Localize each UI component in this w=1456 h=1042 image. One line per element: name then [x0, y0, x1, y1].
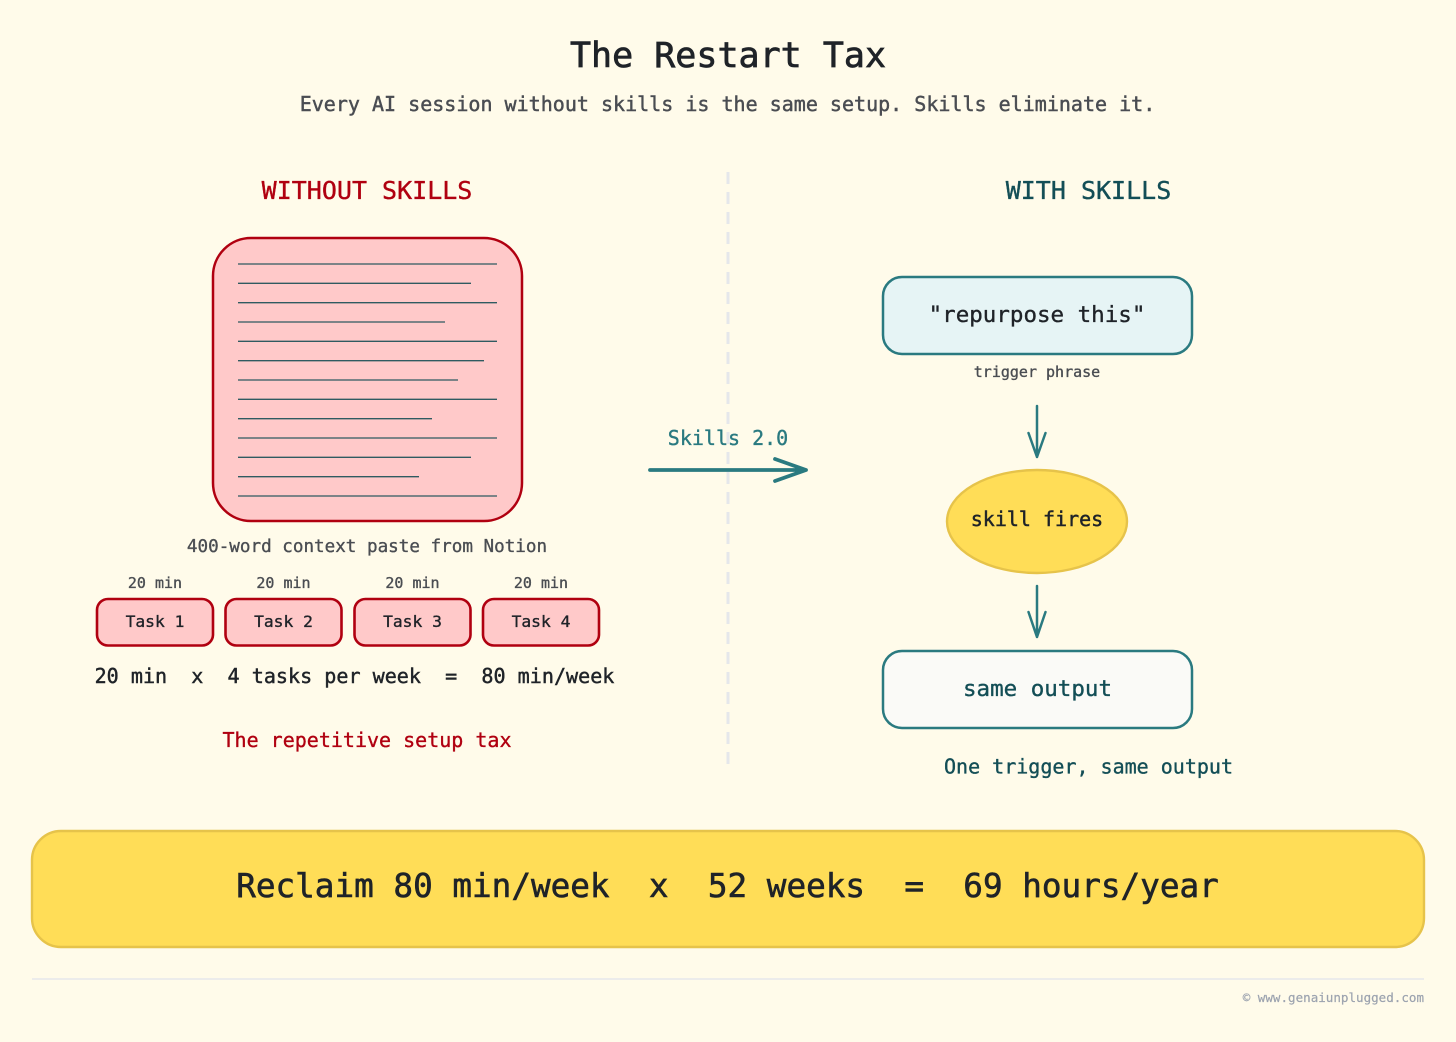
arrow: skills 2.0: Skills 2.0: [668, 426, 788, 450]
skill fires ellipse: [947, 470, 1127, 573]
task 3: Task 3: [383, 612, 442, 631]
skill fires ellipse: skill fires: [971, 507, 1103, 531]
formula: 20 min x 4 tasks per week = 80 min/week: [95, 664, 614, 688]
trigger box: [883, 277, 1192, 354]
arrow down 2: [1028, 586, 1046, 637]
arrow down 1: [1028, 406, 1046, 457]
task 3: 20 min: [385, 574, 440, 592]
footer copyright: © www.genaiunplugged.com: [1243, 990, 1424, 1005]
task 4: 20 min: [514, 574, 568, 592]
task 1: 20 min: [128, 574, 182, 592]
subtitle: Every AI session without skills is the same setup. Skills eliminate it.: [300, 92, 1155, 116]
task 2: [226, 574, 342, 646]
task 4: [483, 574, 599, 646]
task 3: [354, 574, 470, 646]
arrow: skills 2.0: [650, 426, 806, 481]
trigger caption: trigger phrase: [974, 363, 1100, 381]
task 1: [97, 574, 213, 646]
task 2: Task 2: [254, 612, 313, 631]
context paste document: [213, 238, 522, 521]
heading: without skills: WITHOUT SKILLS: [262, 176, 472, 205]
output box: [883, 651, 1192, 728]
task 2: 20 min: [256, 574, 311, 592]
banner: reclaim: [32, 831, 1424, 947]
title: The Restart Tax: [570, 36, 886, 76]
caption: setup tax: The repetitive setup tax: [223, 728, 511, 752]
output box: same output: [963, 676, 1112, 702]
document caption: 400-word context paste from Notion: [187, 537, 547, 557]
banner: reclaim: Reclaim 80 min/week x 52 weeks = 69 hours/year: [236, 867, 1219, 905]
panel: without skills: [95, 176, 614, 752]
caption: one trigger: One trigger, same output: [944, 754, 1233, 778]
task 1: Task 1: [126, 612, 184, 631]
panel: with skills: [883, 176, 1233, 778]
trigger box: "repurpose this": [929, 302, 1145, 328]
heading: with skills: WITH SKILLS: [1006, 176, 1171, 205]
task 4: Task 4: [512, 612, 571, 631]
